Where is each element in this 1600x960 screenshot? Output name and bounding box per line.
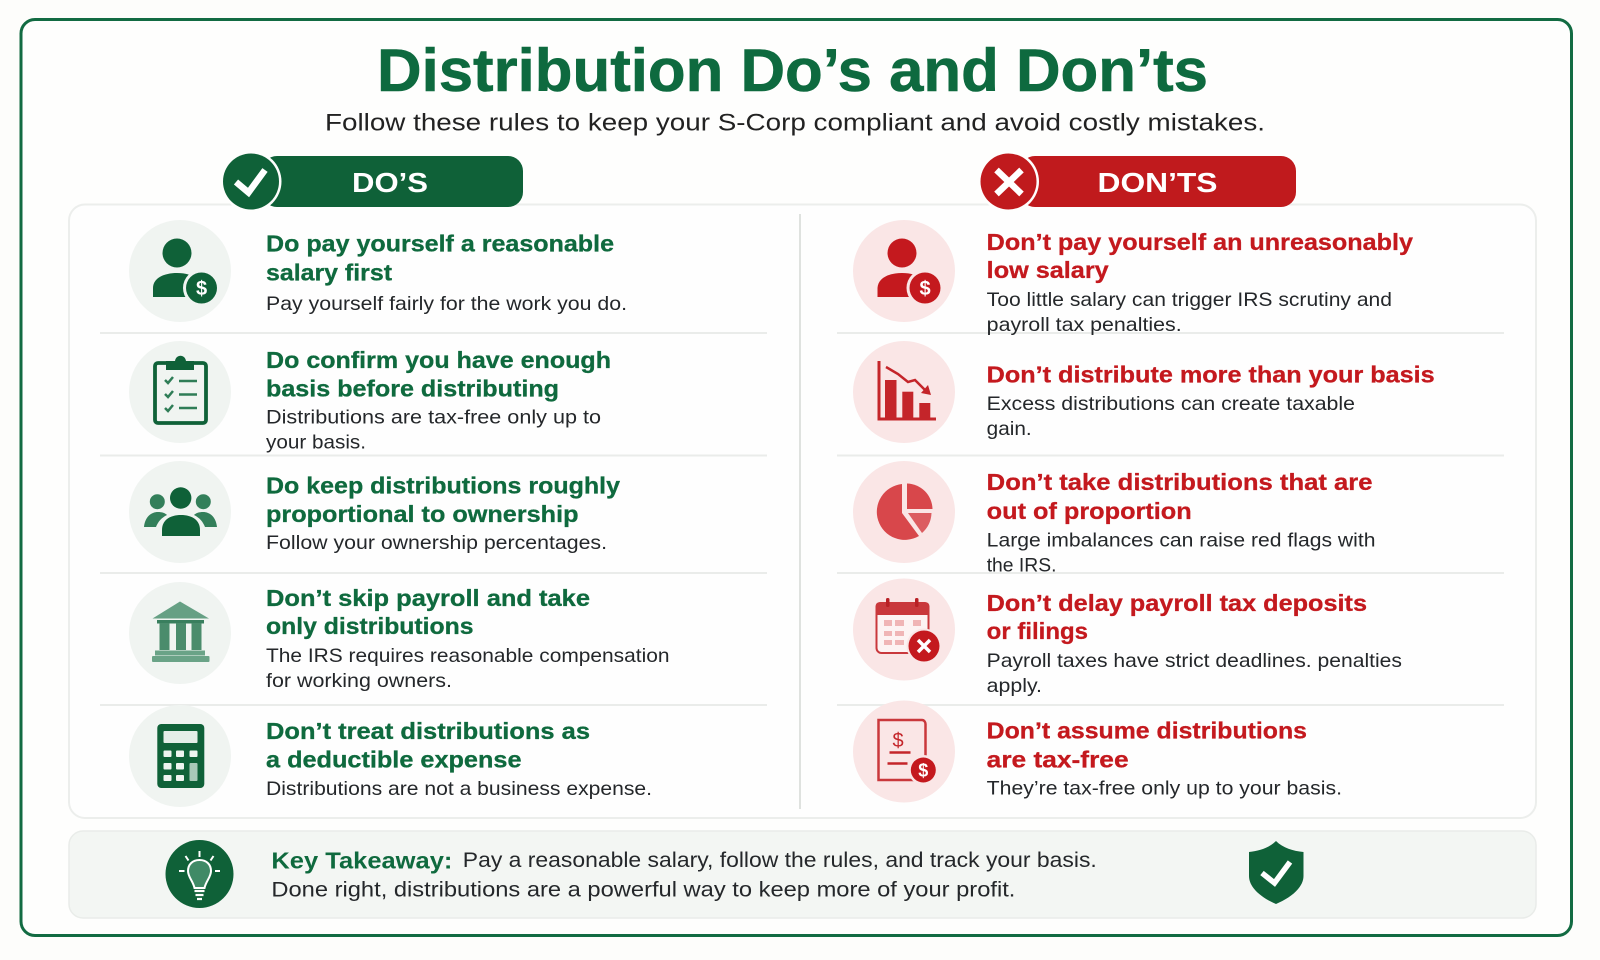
description: payroll tax penalties. [987,314,1182,336]
description: Distributions are tax-free only up to [266,406,601,428]
icon: lightbulb [166,840,234,908]
description: Pay yourself fairly for the work you do. [266,293,627,315]
heading: salary first [266,260,392,286]
header: do's: DO’S [352,167,428,198]
heading: Do pay yourself a reasonable [266,231,614,257]
icon: person with dollar: $ [196,278,207,300]
don't row 1 [853,220,1413,336]
icon: declining chart [853,341,955,443]
description [987,393,1355,440]
description: Follow your ownership percentages. [266,532,607,554]
icon: shield check [1249,841,1304,904]
heading [266,718,590,773]
do row 2 [129,341,611,453]
column divider [799,214,801,809]
icon: clipboard [129,341,231,443]
description: for working owners. [266,670,452,692]
heading: Don’t delay payroll tax deposits [987,590,1367,616]
heading: Don’t take distributions that are [987,469,1372,495]
do row 5 [129,705,652,807]
heading: Don’t assume distributions [987,718,1307,744]
icon: calculator [129,705,231,807]
description: They’re tax-free only up to your basis. [987,778,1342,800]
heading [987,469,1372,524]
don't row 4 [853,578,1402,697]
do row 3 [129,461,620,563]
heading: Don’t pay yourself an unreasonably [987,229,1413,255]
heading: only distributions [266,613,474,639]
description [266,645,670,692]
heading: Don’t distribute more than your basis [987,362,1435,388]
heading: Do confirm you have enough [266,347,611,373]
main panel [69,204,1536,818]
heading [987,229,1413,283]
description: Payroll taxes have strict deadlines. penalties [987,650,1402,672]
description: gain. [987,418,1032,440]
heading [266,347,611,402]
description [987,289,1392,336]
icon: person with dollar [129,220,231,322]
title: Distribution Do’s and Don’ts [377,37,1208,104]
icon: person with dollar: $ [919,278,931,300]
takeaway text: Pay a reasonable salary, follow the rules, and track your basis. [463,848,1097,872]
header: do's [220,151,523,212]
heading: are tax-free [987,746,1129,772]
takeaway text: Done right, distributions are a powerful way to keep more of your profit. [271,878,1015,902]
description: Too little salary can trigger IRS scrutiny and [987,289,1392,311]
icon: bank [129,582,231,684]
description: Large imbalances can raise red flags with [987,530,1376,552]
key takeaway panel [69,831,1536,918]
description [987,530,1376,576]
header: don'ts [978,151,1296,212]
don't row 5 [853,700,1342,802]
description: your basis. [266,431,366,453]
heading: Don’t skip payroll and take [266,585,590,611]
do row 1 [129,220,627,322]
icon: invoice with dollar: $ [892,730,904,752]
description [987,650,1402,697]
description: the IRS. [987,554,1056,576]
description: Excess distributions can create taxable [987,393,1355,415]
icon: people [129,461,231,563]
heading [266,585,590,639]
heading [987,718,1307,772]
heading: out of proportion [987,498,1192,524]
don't row 3 [853,461,1376,576]
row dividers [100,333,1504,705]
heading: proportional to ownership [266,501,578,527]
do row 4 [129,582,670,692]
description: Distributions are not a business expense. [266,778,652,800]
description [266,406,601,453]
heading [266,231,614,286]
icon: calendar with x [853,578,955,680]
heading: low salary [987,257,1109,283]
heading: Don’t treat distributions as [266,718,590,744]
heading [266,472,620,527]
heading: Do keep distributions roughly [266,472,620,498]
heading [987,590,1367,644]
don't row 2 [853,341,1435,443]
icon: person with dollar [853,220,955,322]
takeaway text: Key Takeaway: [271,847,452,873]
takeaway text [271,847,1097,902]
icon: invoice with dollar [853,700,955,802]
heading: a deductible expense [266,747,522,773]
icon: invoice with dollar: $ [918,760,928,780]
heading: basis before distributing [266,376,559,402]
description: The IRS requires reasonable compensation [266,645,670,667]
icon: pie chart [853,461,955,563]
header: don'ts: DON’TS [1098,167,1218,198]
description: apply. [987,675,1042,697]
heading: or filings [987,618,1088,644]
subtitle: Follow these rules to keep your S-Corp compliant and avoid costly mistakes. [325,110,1265,136]
